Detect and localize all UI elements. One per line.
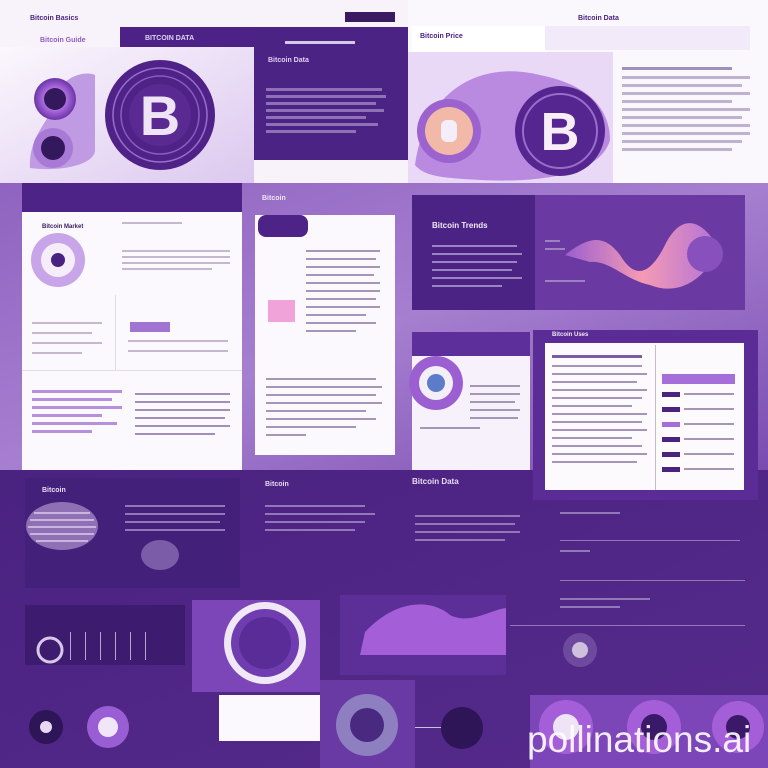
label: heading bar text: BITCOIN DATA [145, 35, 194, 42]
list right [662, 374, 735, 472]
panel: ring [192, 600, 320, 692]
panel: bottom-right lines [510, 598, 745, 667]
panel: top-right coin [408, 0, 768, 183]
icon: small orb top [34, 78, 76, 120]
panel: top-left coin [0, 0, 408, 183]
heading: top-left: Bitcoin Basics [30, 15, 78, 22]
text lines [32, 222, 230, 354]
heading bar [120, 27, 255, 47]
panel: bottom chart [25, 605, 185, 665]
icons: bottom-right orbs [530, 695, 768, 768]
icon: large bitcoin coin [105, 60, 215, 170]
panel: bottom left dark [25, 477, 745, 588]
heading: Bitcoin [42, 487, 66, 494]
heading right: Bitcoin Data [412, 477, 459, 486]
panel: wave dark [340, 595, 506, 675]
heading right: Bitcoin Data [578, 15, 619, 22]
heading: Bitcoin Market [42, 224, 83, 230]
heading: Bitcoin Trends [432, 221, 488, 230]
icons: bottom-centre orbs [320, 680, 483, 768]
icon: bitcoin coin right [515, 86, 605, 176]
text lines [266, 41, 386, 133]
heading: Bitcoin [262, 195, 286, 202]
text lines [420, 385, 520, 429]
panel: middle-left document [22, 183, 242, 470]
chart: wave [565, 223, 720, 289]
icon: large bitcoin coin: B [140, 84, 180, 147]
panel: middle document [255, 195, 395, 455]
panel: right document [533, 330, 758, 500]
icon: small orb bottom [33, 128, 73, 168]
watermark: pollinations.ai [527, 719, 751, 760]
text lines [125, 505, 375, 531]
icon: pin [687, 236, 723, 272]
icon: small cylinder [141, 540, 179, 570]
shape: swoosh [415, 71, 610, 181]
heading: Bitcoin Uses [552, 332, 589, 338]
text lines [622, 67, 750, 151]
heading: Bitcoin Price [420, 33, 463, 40]
heading: Bitcoin Data [268, 57, 309, 64]
icon: bitcoin coin right: B [540, 102, 580, 162]
icon: ring orb [31, 233, 85, 287]
heading centre: Bitcoin [265, 481, 289, 488]
subheading: Bitcoin Guide [40, 37, 86, 44]
icon: orange orb [417, 99, 481, 163]
icon: striped disk [26, 502, 98, 550]
text lines [432, 240, 585, 287]
panel: top dark text [254, 12, 408, 160]
text lines right [415, 512, 745, 581]
icon: orb [409, 356, 463, 410]
lower lines [32, 390, 230, 435]
text lines left [552, 355, 647, 463]
icons: bottom-left orbs [29, 706, 129, 748]
panel: middle-right wave [412, 195, 745, 310]
card: white [219, 695, 320, 741]
text lines [266, 250, 382, 436]
panel: middle-right small card [409, 332, 530, 470]
